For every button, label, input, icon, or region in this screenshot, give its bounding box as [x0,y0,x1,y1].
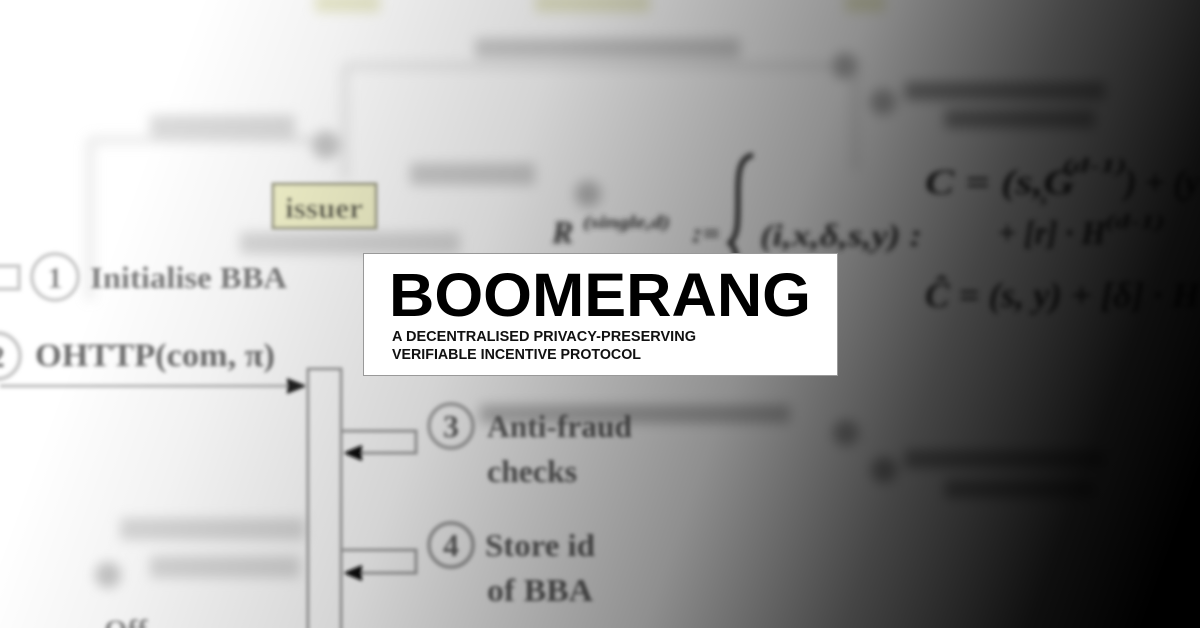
step 1 initialise BBA: Initialise BBA [90,260,288,295]
blurred formula: C = (s,G [925,162,1075,202]
step 1 initialise BBA [0,254,288,300]
steps 3 and 4: of BBA [487,572,593,608]
blurred formula: (d-1) [1105,211,1165,233]
far-blurred upper diagram [90,0,1105,588]
steps 3 and 4: Anti-fraud [487,408,632,444]
subtitle: A DECENTRALISED PRIVACY-PRESERVING [392,329,696,345]
blurred formula: := [692,219,720,248]
blurred formula: (d-1) [1062,155,1127,177]
step 2 OHTTP arrow: OHTTP(com, π) [35,338,275,374]
blurred formula: R [551,214,573,250]
blurred formula: (i,x,δ,s,y) : [760,217,922,253]
lifeline bar with self arrows [308,369,416,628]
subtitle: VERIFIABLE INCENTIVE PROTOCOL [392,347,641,363]
issuer box: issuer [285,192,363,225]
step 1 initialise BBA: 1 [47,260,63,295]
heading: BOOMERANG [389,261,811,329]
steps 3 and 4: 3 [443,408,459,444]
blurred formula [551,155,1200,322]
steps 3 and 4 [429,404,632,608]
steps 3 and 4: Store id [485,527,595,563]
card panel [364,254,838,376]
blurred formula: + [r] · H [998,215,1107,252]
blurred formula: s [1039,189,1047,209]
blurred formula: Ĉ = (s, y) + [δ] · H [925,275,1200,315]
steps 3 and 4: checks [487,453,577,489]
blurred formula: (single,d) [583,212,670,233]
issuer box [273,184,376,228]
steps 3 and 4: 4 [443,527,459,563]
step 2 OHTTP arrow [0,333,307,394]
